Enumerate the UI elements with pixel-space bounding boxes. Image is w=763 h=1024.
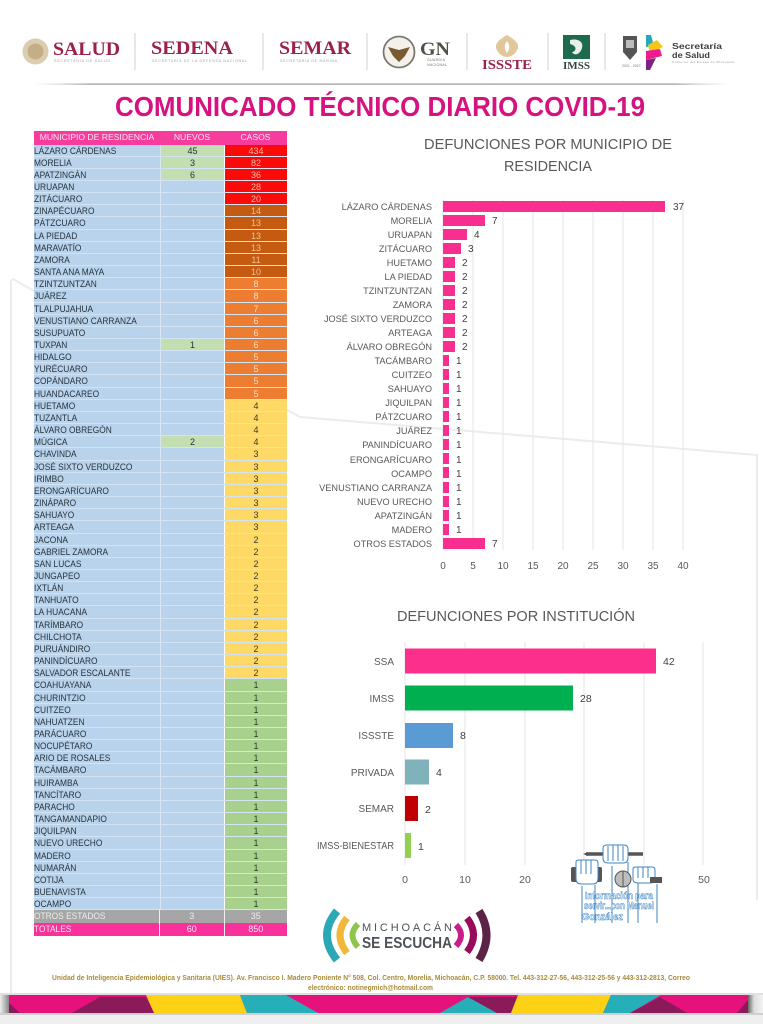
rows: 2 to 4 cases: 2: [253, 583, 258, 593]
rows: 1 case: JIQUILPAN: [34, 826, 77, 836]
rows: 2 to 4 cases: CHAVINDA: [34, 449, 77, 459]
category labels: ERONGARÍCUARO: [350, 455, 432, 465]
category labels: SAHUAYO: [388, 384, 432, 394]
rows: 5 to 8 cases: TUXPAN: [34, 340, 67, 350]
logo: Guardia Nacional: [384, 36, 450, 68]
rows: 1 case: 1: [253, 899, 258, 909]
rows: 1 case: TACÁMBARO: [34, 765, 86, 775]
row: totals: 850: [248, 924, 263, 934]
rows: 2 to 4 cases: CHILCHOTA: [34, 632, 82, 642]
logo: Salud: [22, 38, 120, 64]
x axis: 25: [587, 561, 599, 572]
faint background watermark lines: [11, 279, 757, 995]
rows: 5 to 8 cases: 8: [253, 291, 258, 301]
rows: 2 to 4 cases: [34, 400, 287, 679]
value labels: 1: [456, 426, 462, 437]
x axis: [402, 874, 710, 886]
rows: over 20 cases: 20: [251, 194, 261, 204]
rows: 2 to 4 cases: ERONGARÍCUARO: [34, 486, 109, 496]
rows: 1 case: HUIRAMBA: [34, 778, 78, 788]
footer colour band: [0, 993, 763, 1024]
rows: 5 to 8 cases: 6: [253, 316, 258, 326]
rows: 10 to 14 cases: ZAMORA: [34, 255, 70, 265]
category labels: IMSS-BIENESTAR: [317, 841, 394, 852]
rows: 2 to 4 cases: JUNGAPEO: [34, 571, 80, 581]
rows: 5 to 8 cases: 8: [253, 279, 258, 289]
footer address text: Unidad de Inteligencia Epidemiológica y Sanitaria (UIES). Av. Francisco I. Madero Poniente N° 508, Col. Centro, Morelia, Michoacán, C.P. 58000. Tel. 443-312-27-56, 443-312-25-56 y 443-312-2813, Correo: [52, 974, 690, 982]
rows: 1 case: PARÁCUARO: [34, 729, 86, 739]
rows: 5 to 8 cases: 6: [253, 340, 258, 350]
rows: 2 to 4 cases: TUZANTLA: [34, 413, 77, 423]
logo: Sedena: SEDENA: [151, 39, 234, 59]
rows: 10 to 14 cases: [34, 205, 287, 278]
rows: 5 to 8 cases: 5: [253, 364, 258, 374]
watermark: hands icon with credit text: González: [582, 912, 623, 923]
heading: deaths by municipality: DEFUNCIONES POR MUNICIPIO DE: [424, 137, 672, 153]
rows: 1 case: ARIO DE ROSALES: [34, 753, 110, 763]
rows: 5 to 8 cases: YURÉCUARO: [34, 364, 87, 374]
logo: Semar: SECRETARÍA DE MARINA: [280, 59, 338, 63]
value labels: 1: [456, 370, 462, 381]
rows: 1 case: 1: [253, 838, 258, 848]
rows: 2 to 4 cases: ÁLVARO OBREGÓN: [34, 425, 112, 435]
rows: 2 to 4 cases: 2: [253, 534, 258, 544]
rows: 1 case: NOCUPÉTARO: [34, 741, 92, 751]
category labels: SSA: [374, 657, 394, 668]
value labels: 2: [462, 286, 468, 297]
x axis: 15: [527, 561, 539, 572]
rows: 2 to 4 cases: ARTEAGA: [34, 522, 74, 532]
category labels: PÁTZCUARO: [375, 412, 432, 422]
logo: IMSS: [563, 35, 590, 72]
value labels: 42: [663, 656, 675, 668]
category labels: JIQUILPAN: [385, 398, 432, 408]
rows: 2 to 4 cases: JACONA: [34, 534, 68, 544]
value labels: 2: [462, 342, 468, 353]
rows: 2 to 4 cases: 3: [253, 449, 258, 459]
rows: 2 to 4 cases: IRIMBO: [34, 474, 64, 484]
rows: 2 to 4 cases: ZINÁPARO: [34, 498, 76, 508]
logo: ISSSTE: ISSSTE: [482, 57, 532, 72]
value labels: 2: [462, 328, 468, 339]
bar: IMSS: [405, 686, 573, 710]
logo: Michoacán coat of arms: [622, 36, 641, 68]
rows: 1 case: 1: [253, 753, 258, 763]
row: totals: [34, 922, 287, 936]
rows: 1 case: 1: [253, 887, 258, 897]
rows: over 20 cases: [34, 145, 287, 205]
rows: 10 to 14 cases: 11: [251, 255, 261, 265]
category labels: TACÁMBARO: [374, 356, 432, 366]
rows: 2 to 4 cases: 2: [253, 547, 258, 557]
rows: 2 to 4 cases: 2: [253, 571, 258, 581]
bar chart: deaths by municipality: [319, 200, 689, 572]
logo: Sedena: [151, 39, 247, 63]
rows: 10 to 14 cases: 14: [251, 206, 261, 216]
value labels: 1: [456, 469, 462, 480]
x axis: 20: [557, 561, 569, 572]
rows: 2 to 4 cases: 3: [253, 522, 258, 532]
value labels: 3: [468, 244, 474, 255]
rows: 1 case: OCAMPO: [34, 899, 71, 909]
category labels: VENUSTIANO CARRANZA: [319, 483, 433, 493]
row: other states: 35: [251, 911, 261, 921]
rows: 1 case: 1: [253, 802, 258, 812]
rows: 5 to 8 cases: VENUSTIANO CARRANZA: [34, 316, 137, 326]
value labels: 1: [456, 525, 462, 536]
category labels: MADERO: [392, 525, 432, 535]
table: cases by municipality: [34, 131, 287, 936]
rows: 10 to 14 cases: 10: [251, 267, 261, 277]
rows: 5 to 8 cases: JUÁREZ: [34, 291, 67, 301]
rows: 1 case: TANGAMANDAPIO: [34, 814, 107, 824]
value labels: [456, 202, 685, 550]
row: other states: OTROS ESTADOS: [34, 911, 105, 921]
rows: 2 to 4 cases: IXTLÁN: [34, 583, 63, 593]
x axis: 0: [440, 561, 446, 572]
value labels: 2: [425, 804, 431, 816]
rows: 10 to 14 cases: 13: [251, 231, 261, 241]
rows: 1 case: COTIJA: [34, 875, 64, 885]
value labels: 2: [462, 272, 468, 283]
rows: 5 to 8 cases: [34, 278, 287, 400]
heading: deaths by institution: DEFUNCIONES POR INSTITUCIÓN: [397, 608, 635, 625]
table header: CASOS: [240, 132, 271, 142]
rows: 2 to 4 cases: HUETAMO: [34, 401, 75, 411]
rows: over 20 cases: ZITÁCUARO: [34, 194, 82, 204]
rows: 2 to 4 cases: 2: [253, 620, 258, 630]
header logo strip: [22, 33, 735, 72]
rows: 1 case: [34, 679, 287, 910]
rows: 2 to 4 cases: TARÍMBARO: [34, 620, 83, 630]
rows: 2 to 4 cases: 3: [253, 498, 258, 508]
logo: IMSS: IMSS: [563, 60, 590, 72]
value labels: 1: [456, 412, 462, 423]
rows: 1 case: 1: [253, 778, 258, 788]
category labels: NUEVO URECHO: [357, 497, 432, 507]
rows: 2 to 4 cases: GABRIEL ZAMORA: [34, 547, 108, 557]
rows: 10 to 14 cases: ZINAPÉCUARO: [34, 206, 94, 216]
rows: 2 to 4 cases: 2: [253, 595, 258, 605]
row: totals: TOTALES: [34, 924, 71, 934]
rows: 1 case: 1: [253, 851, 258, 861]
value labels: 2: [462, 314, 468, 325]
rows: 5 to 8 cases: TLALPUJAHUA: [34, 304, 93, 314]
rows: 5 to 8 cases: 7: [253, 304, 258, 314]
rows: 1 case: 1: [253, 717, 258, 727]
category labels: HUETAMO: [387, 258, 432, 268]
category labels: LA PIEDAD: [384, 272, 432, 282]
rows: 2 to 4 cases: PANINDÍCUARO: [34, 656, 98, 666]
rows: 2 to 4 cases: 2: [253, 656, 258, 666]
rows: 2 to 4 cases: 2: [253, 644, 258, 654]
rows: 1 case: TANCÍTARO: [34, 790, 81, 800]
rows: 1 case: CHURINTZIO: [34, 693, 86, 703]
value labels: 1: [456, 398, 462, 409]
rows: 1 case: 1: [253, 790, 258, 800]
logo: Secretaría de Salud Michoacán: de Salud: [672, 51, 710, 60]
rows: 5 to 8 cases: 5: [253, 376, 258, 386]
rows: 10 to 14 cases: 13: [251, 218, 261, 228]
rows: over 20 cases: 3: [190, 158, 195, 168]
rows: 2 to 4 cases: 2: [253, 607, 258, 617]
category labels: OCAMPO: [391, 469, 432, 479]
value labels: 1: [456, 440, 462, 451]
rows: 2 to 4 cases: 2: [253, 668, 258, 678]
value labels: 1: [456, 384, 462, 395]
logo: Michoacán se escucha: SE ESCUCHA: [362, 935, 452, 952]
rows: 1 case: NUEVO URECHO: [34, 838, 102, 848]
rows: 1 case: NUMARÁN: [34, 863, 76, 873]
value labels: 2: [462, 258, 468, 269]
rows: 2 to 4 cases: 4: [253, 437, 258, 447]
bars: [443, 201, 665, 549]
rows: 1 case: 1: [253, 680, 258, 690]
bar: ISSSTE: [405, 723, 453, 748]
logo: Secretaría de Salud Michoacán: [646, 35, 735, 70]
value labels: 2: [462, 300, 468, 311]
value labels: 7: [492, 539, 498, 550]
footer address text: electrónico: notinegmich@hotmail.com: [308, 985, 433, 992]
category labels: JUÁREZ: [396, 426, 432, 436]
rows: 2 to 4 cases: MÚGICA: [34, 437, 67, 447]
bar: IMSS-Bienestar: [405, 833, 411, 858]
rows: over 20 cases: 36: [251, 170, 261, 180]
logo: Secretaría de Salud Michoacán: Secretaría: [672, 42, 723, 51]
value labels: 4: [436, 767, 442, 779]
x axis: [440, 561, 689, 572]
x axis: 5: [470, 561, 476, 572]
rows: 2 to 4 cases: 2: [190, 437, 195, 447]
logo: ISSSTE: [482, 35, 532, 72]
x axis: 30: [617, 561, 629, 572]
logo: Secretaría de Salud Michoacán: Gobierno del Estado de Michoacán: [672, 60, 735, 64]
bar chart: deaths by institution: [317, 642, 710, 886]
rows: 2 to 4 cases: TANHUATO: [34, 595, 79, 605]
rows: 2 to 4 cases: LA HUACANA: [34, 607, 87, 617]
category labels: PRIVADA: [351, 768, 394, 779]
x axis: 0: [402, 874, 408, 886]
rows: 2 to 4 cases: 3: [253, 462, 258, 472]
category labels: URUAPAN: [388, 230, 432, 240]
value labels: 1: [456, 483, 462, 494]
bar: Privada: [405, 760, 429, 784]
value labels: 1: [456, 497, 462, 508]
heading: deaths by municipality: [424, 137, 672, 175]
category labels: ZITÁCUARO: [379, 244, 432, 254]
rows: 2 to 4 cases: 3: [253, 510, 258, 520]
rows: over 20 cases: 28: [251, 182, 261, 192]
category labels: ZAMORA: [393, 300, 433, 310]
logo: Guardia Nacional: GN: [420, 39, 450, 60]
rows: 5 to 8 cases: 5: [253, 352, 258, 362]
footer address text: [52, 974, 690, 992]
watermark: hands icon with credit text: Información para: [585, 891, 653, 902]
rows: 5 to 8 cases: 5: [253, 389, 258, 399]
rows: 5 to 8 cases: HIDALGO: [34, 352, 72, 362]
value labels: 1: [456, 511, 462, 522]
category labels: SEMAR: [358, 804, 394, 815]
rows: 1 case: 1: [253, 863, 258, 873]
rows: 2 to 4 cases: 2: [253, 632, 258, 642]
rows: 5 to 8 cases: 6: [253, 328, 258, 338]
rows: 2 to 4 cases: JOSÉ SIXTO VERDUZCO: [34, 462, 132, 472]
watermark: hands icon with credit text: [571, 845, 662, 923]
rows: over 20 cases: 434: [248, 146, 264, 156]
logo: Sedena: SECRETARÍA DE LA DEFENSA NACIONAL: [152, 59, 247, 63]
value labels: 7: [492, 216, 498, 227]
value labels: 8: [460, 730, 466, 742]
table header: MUNICIPIO DE RESIDENCIA: [40, 132, 154, 142]
bar: SSA: [405, 648, 656, 674]
rows: 2 to 4 cases: SALVADOR ESCALANTE: [34, 668, 130, 678]
rows: 10 to 14 cases: MARAVATÍO: [34, 243, 81, 253]
rows: 1 case: 1: [253, 765, 258, 775]
category labels: LÁZARO CÁRDENAS: [342, 202, 432, 212]
microphone: [615, 871, 631, 887]
rows: 1 case: PARACHO: [34, 802, 75, 812]
table header: NUEVOS: [174, 132, 210, 142]
category labels: [319, 202, 433, 549]
rows: 5 to 8 cases: 1: [190, 340, 195, 350]
rows: 2 to 4 cases: 4: [253, 425, 258, 435]
logo: Guardia Nacional: GUARDIA: [427, 58, 446, 62]
row: other states: [34, 910, 287, 922]
rows: over 20 cases: 45: [187, 146, 198, 156]
value labels: 28: [580, 693, 592, 705]
x axis: 40: [677, 561, 689, 572]
watermark: hands icon with credit text: servir...con Manuel: [584, 901, 654, 912]
rows: 2 to 4 cases: 3: [253, 474, 258, 484]
rows: 1 case: MADERO: [34, 851, 71, 861]
category labels: MORELIA: [391, 216, 433, 226]
rows: 10 to 14 cases: PÁTZCUARO: [34, 218, 86, 228]
rows: 5 to 8 cases: TZINTZUNTZAN: [34, 279, 97, 289]
heading: deaths by municipality: RESIDENCIA: [504, 159, 592, 175]
table header: [34, 131, 287, 144]
value labels: 1: [456, 455, 462, 466]
rows: over 20 cases: MORELIA: [34, 158, 72, 168]
category labels: [317, 657, 394, 852]
rows: over 20 cases: LÁZARO CÁRDENAS: [34, 146, 116, 156]
logo: Salud: SECRETARÍA DE SALUD: [54, 59, 110, 63]
logo: Salud: SALUD: [53, 40, 120, 60]
rows: over 20 cases: APATZINGÁN: [34, 170, 86, 180]
x axis: 10: [497, 561, 509, 572]
value labels: 1: [418, 841, 424, 853]
rows: 2 to 4 cases: SAN LUCAS: [34, 559, 81, 569]
rows: 1 case: 1: [253, 705, 258, 715]
rows: 5 to 8 cases: HUANDACAREO: [34, 389, 99, 399]
rows: 1 case: 1: [253, 693, 258, 703]
x axis: 50: [698, 874, 710, 886]
category labels: APATZINGÁN: [375, 511, 432, 521]
rows: 1 case: 1: [253, 729, 258, 739]
logo: Semar: SEMAR: [279, 39, 352, 59]
category labels: JOSÉ SIXTO VERDUZCO: [324, 314, 432, 324]
rows: over 20 cases: URUAPAN: [34, 182, 74, 192]
category labels: OTROS ESTADOS: [354, 539, 432, 549]
rows: 1 case: COAHUAYANA: [34, 680, 91, 690]
value labels: 4: [474, 230, 480, 241]
category labels: ISSSTE: [358, 731, 394, 742]
category labels: PANINDÍCUARO: [362, 440, 432, 450]
bar: SEMAR: [405, 796, 418, 821]
rows: 2 to 4 cases: 4: [253, 401, 258, 411]
rows: 2 to 4 cases: PURUÁNDIRO: [34, 644, 90, 654]
x axis: 10: [459, 874, 471, 886]
rows: 2 to 4 cases: SAHUAYO: [34, 510, 74, 520]
value labels: 1: [456, 356, 462, 367]
row: other states: 3: [189, 911, 194, 921]
logo: Michoacán se escucha: [327, 911, 486, 960]
rows: 1 case: 1: [253, 741, 258, 751]
rows: 1 case: 1: [253, 875, 258, 885]
logo: Guardia Nacional: NACIONAL: [427, 63, 447, 67]
rows: 1 case: NAHUATZEN: [34, 717, 85, 727]
rows: 5 to 8 cases: SUSUPUATO: [34, 328, 85, 338]
row: totals: 60: [187, 924, 197, 934]
rows: 10 to 14 cases: SANTA ANA MAYA: [34, 267, 104, 277]
category labels: IMSS: [370, 694, 394, 705]
value labels: 37: [673, 202, 685, 213]
value labels: [418, 656, 675, 853]
rows: over 20 cases: 82: [251, 158, 261, 168]
rows: 2 to 4 cases: 4: [253, 413, 258, 423]
rows: 10 to 14 cases: 13: [251, 243, 261, 253]
rows: 10 to 14 cases: LA PIEDAD: [34, 231, 77, 241]
category labels: CUITZEO: [392, 370, 432, 380]
logo: Michoacán se escucha: MICHOACÁN: [362, 921, 452, 934]
rows: 1 case: 1: [253, 814, 258, 824]
category labels: TZINTZUNTZAN: [363, 286, 432, 296]
rows: 5 to 8 cases: COPÁNDARO: [34, 376, 88, 386]
category labels: ARTEAGA: [388, 328, 433, 338]
rows: 2 to 4 cases: 2: [253, 559, 258, 569]
x axis: 35: [647, 561, 659, 572]
rows: 1 case: 1: [253, 826, 258, 836]
x axis: 20: [519, 874, 531, 886]
rows: 1 case: CUITZEO: [34, 705, 71, 715]
rows: 2 to 4 cases: 3: [253, 486, 258, 496]
rows: 1 case: BUENAVISTA: [34, 887, 86, 897]
rows: over 20 cases: 6: [190, 170, 195, 180]
title: COMUNICADO TÉCNICO DIARIO COVID-19: [115, 91, 645, 122]
logo: Michoacán coat of arms: 2021 - 2027: [622, 64, 641, 68]
category labels: ÁLVARO OBREGÓN: [347, 342, 432, 352]
